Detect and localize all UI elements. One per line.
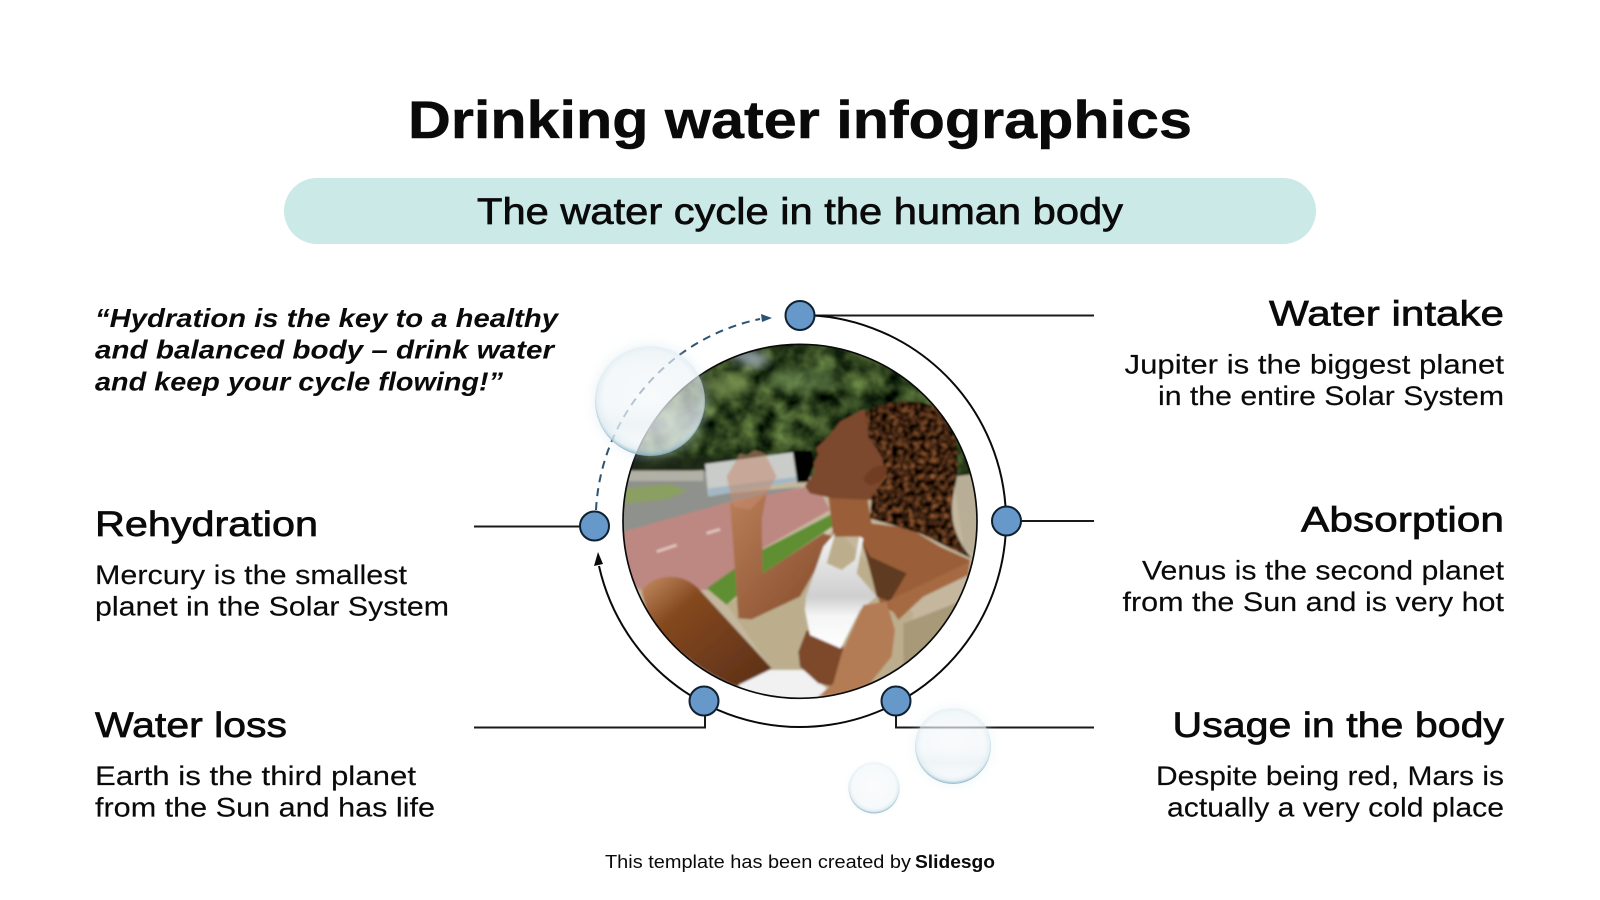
bubble small bbox=[848, 762, 900, 814]
block: rehydration: Mercury is the smallest bbox=[95, 560, 408, 590]
block: absorption bbox=[1122, 500, 1505, 617]
shorts bbox=[738, 670, 827, 700]
block: absorption: from the Sun and is very hot bbox=[1122, 587, 1505, 617]
road bbox=[620, 470, 803, 533]
block: usage in the body: Despite being red, Mars is bbox=[1156, 761, 1504, 791]
cycle nodes bbox=[580, 301, 1021, 716]
block: water loss bbox=[95, 706, 435, 822]
quote: “Hydration is the key to a healthy bbox=[95, 303, 560, 333]
face bbox=[805, 409, 888, 500]
bench bbox=[903, 602, 956, 664]
underarm shadow bbox=[863, 543, 907, 602]
block: water intake: Water intake bbox=[1269, 294, 1504, 334]
block: usage in the body: actually a very cold place bbox=[1167, 792, 1504, 822]
photo: woman drinking water bbox=[620, 343, 980, 700]
block: water intake: in the entire Solar System bbox=[1158, 381, 1504, 411]
subtitle pill bbox=[284, 178, 1316, 244]
pavement bbox=[727, 528, 913, 700]
bubble large bbox=[592, 343, 708, 459]
subtitle pill: The water cycle in the human body bbox=[477, 191, 1124, 232]
grass island bbox=[625, 484, 687, 504]
connector lines bbox=[474, 316, 1094, 728]
dashed return arrow bbox=[596, 314, 772, 510]
abdomen bbox=[798, 630, 843, 688]
curly hair bbox=[865, 401, 972, 558]
water bottle bbox=[705, 452, 799, 497]
sports top bbox=[805, 533, 877, 648]
trees bbox=[620, 343, 980, 477]
block: rehydration: planet in the Solar System bbox=[95, 592, 449, 622]
fingers on bottle bbox=[727, 450, 777, 510]
block: water intake bbox=[1124, 294, 1505, 411]
title: Drinking water infographics bbox=[408, 91, 1192, 150]
quote bbox=[95, 303, 560, 396]
quote: and balanced body – drink water bbox=[95, 334, 556, 364]
block: water loss: Earth is the third planet bbox=[95, 761, 417, 791]
quote: and keep your cycle flowing!” bbox=[95, 366, 503, 396]
bubble medium bbox=[913, 706, 993, 786]
raised leg bbox=[642, 577, 772, 687]
left arm bbox=[730, 493, 833, 619]
block: water loss: Water loss bbox=[95, 706, 287, 745]
neck and shoulders bbox=[828, 493, 970, 617]
red cycle path bbox=[620, 485, 830, 590]
grass strip bbox=[707, 512, 837, 605]
block: usage in the body: Usage in the body bbox=[1172, 706, 1505, 745]
block: rehydration bbox=[95, 505, 449, 622]
block: absorption: Venus is the second planet bbox=[1142, 556, 1505, 586]
footer credit: Slidesgo bbox=[915, 852, 995, 872]
cycle ring with arrow bbox=[594, 315, 1006, 727]
block: absorption: Absorption bbox=[1301, 500, 1504, 540]
block: water intake: Jupiter is the biggest planet bbox=[1124, 350, 1505, 380]
ear bbox=[863, 466, 887, 485]
block: usage in the body bbox=[1156, 706, 1505, 822]
right hand bbox=[818, 602, 895, 697]
block: water loss: from the Sun and has life bbox=[95, 792, 435, 822]
footer credit: This template has been created by bbox=[605, 852, 911, 872]
block: rehydration: Rehydration bbox=[95, 505, 318, 544]
